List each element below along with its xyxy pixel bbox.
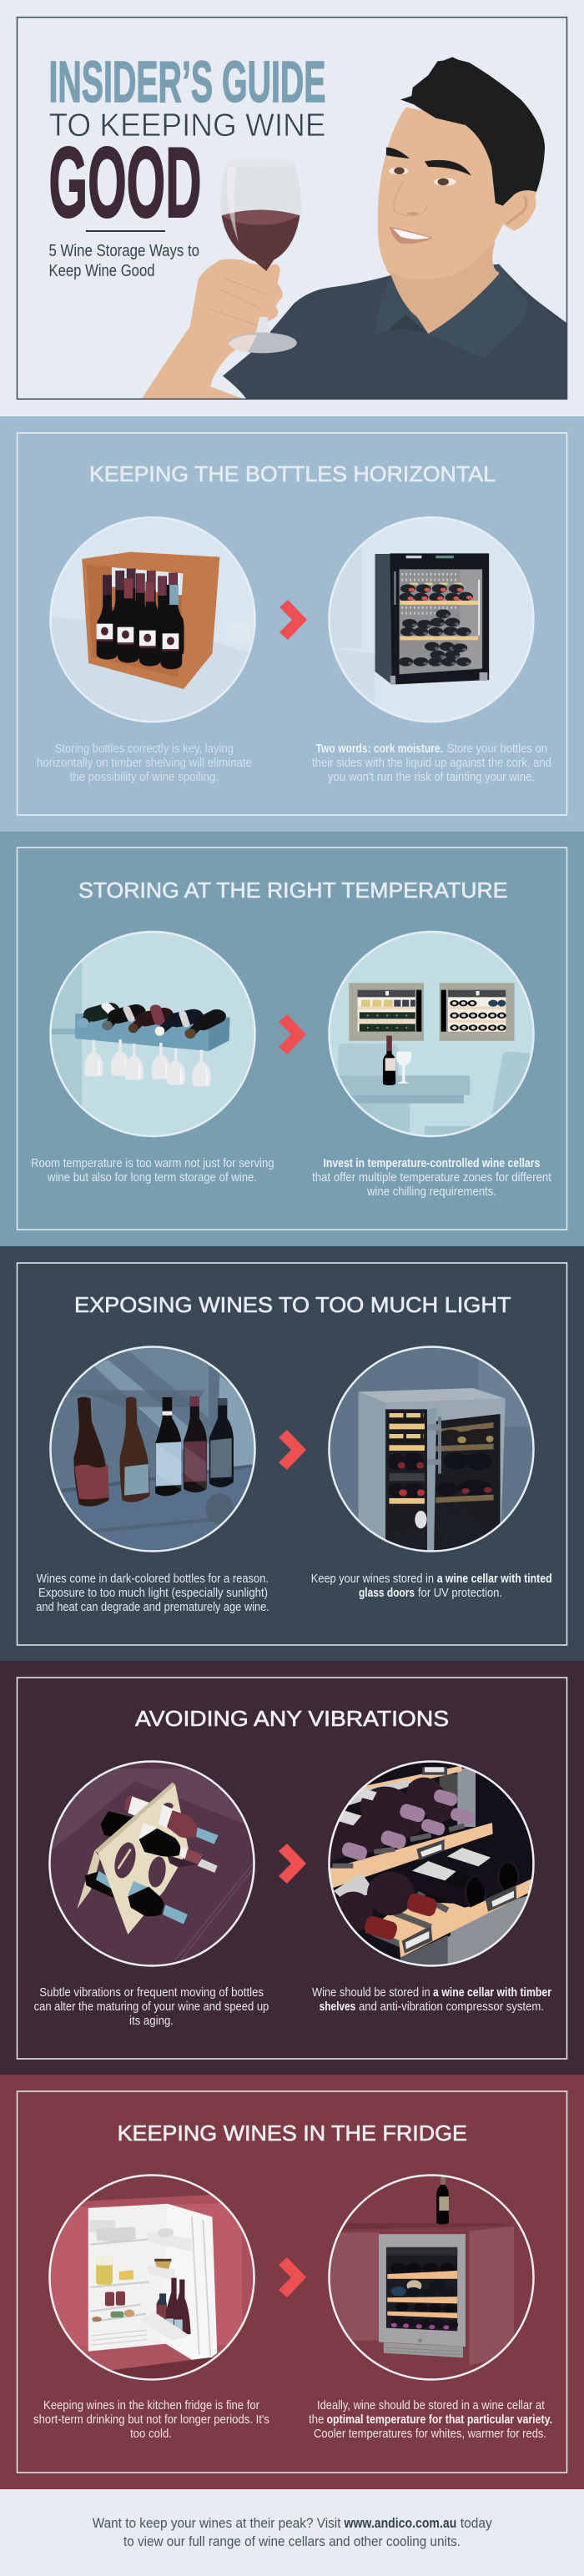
subtitle: 5 Wine Storage Ways to: [48, 242, 199, 260]
footer text: [93, 2515, 492, 2549]
wine glass: [220, 159, 301, 261]
text: left: can alter the maturing of your wine and speed up: [34, 2000, 269, 2014]
subtitle: [48, 242, 199, 280]
footer text: Want to keep your wines at their peak? Visit: [93, 2515, 341, 2531]
text: right: that offer multiple temperature zones for different: [312, 1171, 551, 1185]
hair: [400, 57, 545, 206]
illustration: timber box with bottles: [49, 517, 261, 723]
text: left: wine but also for long term storage of wine.: [47, 1171, 257, 1185]
text: left: [33, 2399, 269, 2441]
text: right: [312, 1986, 551, 2014]
text: left: its aging.: [129, 2015, 174, 2028]
text: right: Two words: cork moisture.: [316, 742, 443, 756]
text: right: a wine cellar with timber: [433, 1986, 551, 2000]
illustration: under-bench wine cellar: [330, 2177, 514, 2366]
heading: EXPOSING WINES TO TOO MUCH LIGHT: [74, 1292, 511, 1317]
text: right: [309, 2399, 552, 2441]
illustration: built-in wine cabinets: [329, 931, 534, 1138]
header panel: [17, 17, 567, 400]
header border: [17, 18, 567, 399]
title: GOOD: [48, 127, 202, 239]
footer: [0, 2489, 584, 2576]
circle outlines: [50, 932, 534, 1136]
text: right: and anti-vibration compressor system.: [359, 2000, 544, 2014]
illustration: wine cellar fridge: [329, 517, 534, 723]
text: left: short-term drinking but not for longer periods. It's: [33, 2413, 269, 2427]
footer text: to view our full range of wine cellars and other cooling units.: [123, 2533, 461, 2549]
illustration: man holding wine glass: [141, 57, 568, 400]
arrow: [279, 1015, 305, 1054]
text: left: [34, 1986, 269, 2028]
collar: [499, 264, 501, 265]
text: left: Keeping wines in the kitchen fridge is fine for: [43, 2399, 259, 2412]
text: right: their sides with the liquid up against the cork, and: [312, 757, 551, 770]
ear: [504, 196, 536, 231]
eyes: [389, 168, 408, 174]
text: right: glass doors: [359, 1587, 415, 1600]
panel: keeping the bottles horizontal: [0, 416, 584, 832]
illustration: wall rack with glasses: [48, 931, 255, 1140]
text: right: wine chilling requirements.: [366, 1185, 496, 1199]
text: right: you won't run the risk of tainting your wine.: [328, 771, 535, 784]
circle outlines: [50, 2176, 534, 2379]
text: left: Exposure to too much light (especially sunlight): [38, 1587, 268, 1600]
text: right: optimal temperature for that particular variety.: [327, 2413, 552, 2427]
title: TO KEEPING WINE: [48, 108, 325, 143]
text: right: for UV protection.: [418, 1587, 502, 1600]
title: INSIDER’S GUIDE: [48, 49, 325, 114]
panel: exposing wines to too much light: [0, 1246, 584, 1661]
text: right: shelves: [320, 2000, 355, 2014]
text: right: [312, 742, 551, 784]
nose: [394, 181, 426, 215]
divider line: [86, 230, 165, 232]
text: left: the possibility of wine spoiling.: [70, 771, 219, 784]
text: right: Invest in temperature-controlled wine cellars: [324, 1157, 540, 1170]
subtitle: Keep Wine Good: [48, 262, 155, 280]
arrow: [280, 601, 306, 639]
text: left: and heat can degrade and prematurely age wine.: [36, 1601, 269, 1614]
arrow: [279, 1431, 305, 1469]
heading: KEEPING WINES IN THE FRIDGE: [118, 2121, 467, 2146]
text: right: [311, 1572, 552, 1600]
arrow: [279, 1844, 305, 1883]
illustration: timber shelves close-up: [325, 1761, 534, 1969]
footer text: today: [461, 2515, 492, 2531]
text: left: [37, 742, 252, 784]
text: left: Wines come in dark-colored bottles for a reason.: [37, 1572, 269, 1586]
text: left: Storing bottles correctly is key, laying: [55, 742, 234, 756]
panel: storing at the right temperature: [0, 832, 584, 1246]
illustration: kitchen fridge: [50, 2195, 254, 2378]
panel: keeping wines in the fridge: [0, 2075, 584, 2489]
mouth: [390, 227, 433, 244]
illustration: bottles in sunlight: [48, 1346, 261, 1557]
heading: AVOIDING ANY VIBRATIONS: [135, 1706, 449, 1731]
text: left: too cold.: [130, 2428, 172, 2441]
text: left: horizontally on timber shelving will eliminate: [37, 757, 252, 770]
text: right: Cooler temperatures for whites, warmer for reds.: [314, 2428, 546, 2441]
circle outlines: [50, 1762, 534, 1965]
text: right: a wine cellar with tinted: [437, 1572, 552, 1586]
illustration: cream wine rack with bottles: [42, 1761, 256, 1966]
title: [48, 49, 325, 239]
arrow: [279, 2258, 305, 2297]
circle outlines: [50, 517, 534, 722]
shirt: [223, 264, 568, 400]
text: right: Store your bottles on: [447, 742, 547, 756]
text: left: Subtle vibrations or frequent moving of bottles: [39, 1986, 264, 2000]
neck and face: [378, 107, 536, 334]
heading: STORING AT THE RIGHT TEMPERATURE: [78, 878, 507, 903]
text: right: Ideally, wine should be stored in a wine cellar at: [317, 2399, 545, 2412]
arm and hand: [141, 259, 283, 400]
text: left: Room temperature is too warm not just for serving: [31, 1157, 274, 1170]
text: left: [31, 1157, 274, 1185]
footer text: www.andico.com.au: [344, 2515, 456, 2531]
panel: avoiding any vibrations: [0, 1661, 584, 2075]
text: right: Keep your wines stored in: [311, 1572, 434, 1586]
illustration: wine cellar with tinted glass door: [329, 1343, 538, 1554]
heading: KEEPING THE BOTTLES HORIZONTAL: [89, 461, 496, 486]
text: right: [312, 1157, 551, 1199]
text: left: [36, 1572, 269, 1614]
eyebrows: [386, 148, 410, 158]
text: right: the: [309, 2413, 324, 2427]
text: right: Wine should be stored in: [312, 1986, 430, 2000]
circle outlines: [50, 1346, 534, 1552]
